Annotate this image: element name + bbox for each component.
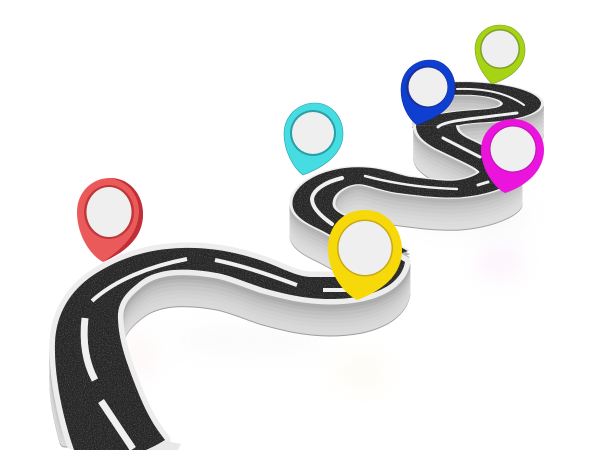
road: far upper section with walls: [412, 88, 522, 158]
road: near section with walls: [55, 248, 405, 450]
pin: yellow: [328, 210, 402, 300]
road: middle section with walls: [312, 125, 499, 288]
road: lane markings near section: [84, 259, 347, 449]
pin: red: [77, 178, 143, 262]
pin: green: [475, 25, 525, 84]
road curb: [55, 248, 405, 444]
road: lane markings far sections: [312, 89, 524, 224]
soft colour reflections on the floor: [128, 201, 530, 388]
pin: cyan: [284, 103, 343, 175]
pin: blue: [401, 60, 455, 125]
pin: magenta: [481, 119, 544, 193]
road: front end face: [146, 441, 181, 450]
road surface: [55, 248, 405, 450]
